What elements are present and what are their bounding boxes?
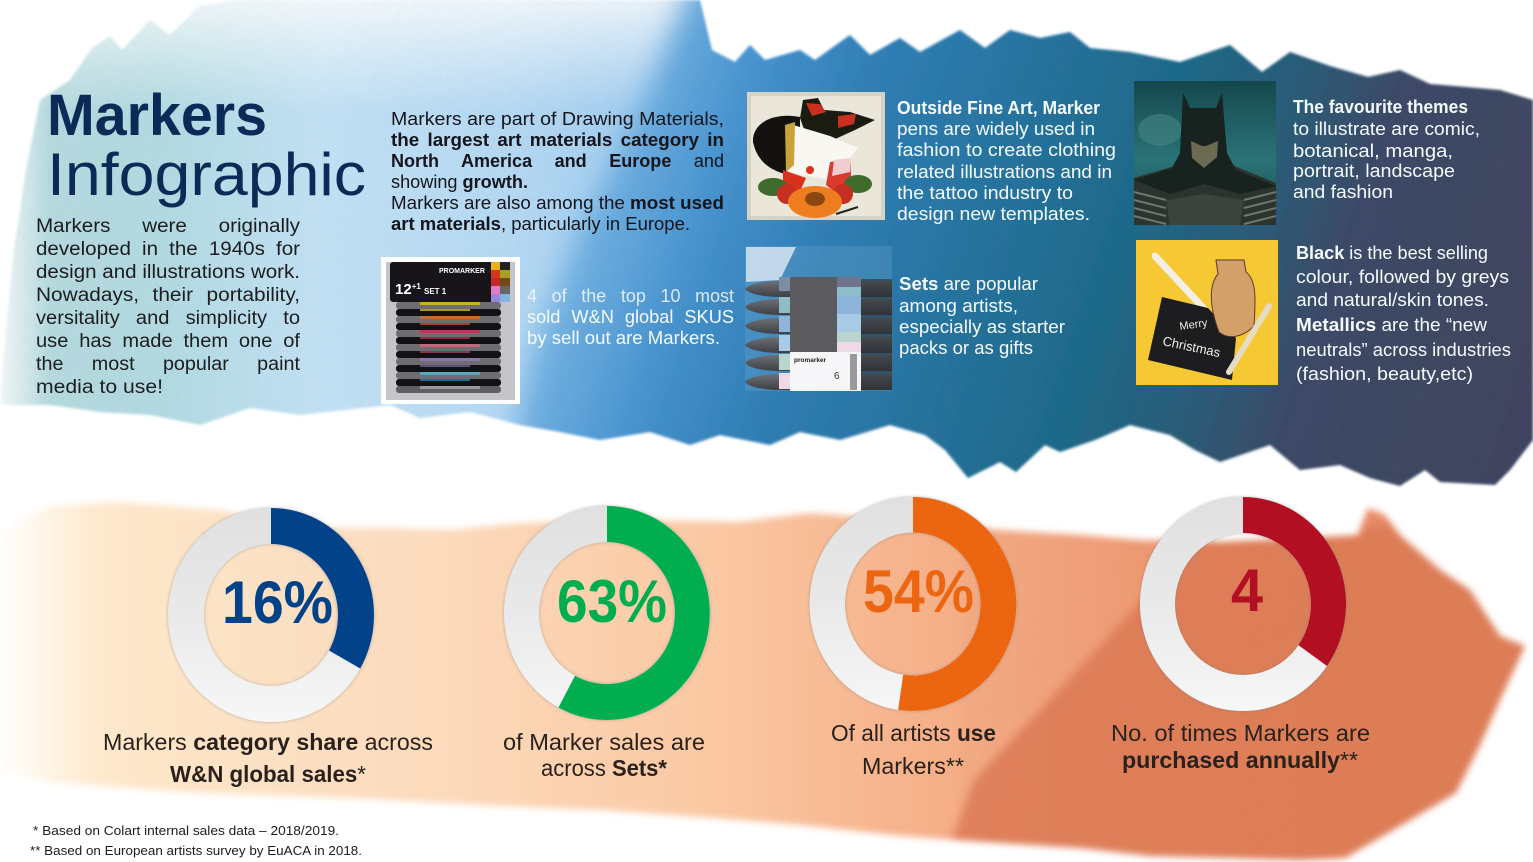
text block: outside fine art: Outside Fine Art, Marker [897, 97, 1100, 118]
text block: top ten SKUs: by sell out are Markers. [527, 327, 720, 348]
title: Infographic [47, 141, 366, 208]
text block: outside fine art [897, 97, 1116, 224]
text block: outside fine art: fashion to create clothing [897, 139, 1116, 160]
caption: artists: Markers** [862, 753, 964, 779]
caption: category share: Markers category share across [103, 729, 433, 755]
text block: outside fine art: the tattoo industry to [897, 182, 1073, 203]
text block: outside fine art: design new templates. [897, 203, 1090, 224]
caption: sets: across Sets* [541, 755, 667, 781]
text block: sets: especially as starter [899, 316, 1065, 337]
text block: drawing materials: art materials, particularly in Europe. [391, 213, 690, 234]
text block: best selling colours: neutrals” across industries [1296, 339, 1511, 360]
title: Markers [47, 83, 267, 148]
footnotes [30, 823, 362, 858]
text block: favourite themes: The favourite themes [1293, 96, 1468, 117]
footnotes: * Based on Colart internal sales data – 2018/2019. [33, 823, 339, 838]
text block: history of markers: Markers were originally [36, 216, 301, 237]
text block: history of markers: Nowadays, their portability, [36, 285, 300, 306]
text block: top ten SKUs [527, 285, 734, 348]
text block: favourite themes: portrait, landscape [1293, 160, 1455, 181]
text block: history of markers: media to use! [36, 377, 163, 398]
footnotes: ** Based on European artists survey by EuACA in 2018. [30, 843, 362, 858]
caption: purchases: No. of times Markers are [1111, 720, 1370, 746]
text block: favourite themes [1293, 96, 1480, 202]
text block: history of markers: developed in the 1940s for [36, 239, 301, 260]
image: metallic pens on yellow [1136, 240, 1278, 385]
text block: best selling colours [1296, 242, 1511, 384]
donut chart: 4 purchases per year [1140, 497, 1346, 711]
caption: purchases: purchased annually** [1122, 747, 1358, 773]
image: Promarker 12 set pack [381, 257, 520, 404]
text block: top ten SKUs: 4 of the top 10 most [527, 285, 734, 306]
text block: best selling colours: (fashion, beauty,etc) [1296, 363, 1473, 384]
image: Promarker 6 set: 6 [834, 371, 840, 382]
text block: sets [899, 273, 1065, 358]
text block: outside fine art: pens are widely used in [897, 118, 1095, 139]
image: Batman comic illustration [1134, 81, 1276, 225]
text block: favourite themes: to illustrate are comic, [1293, 118, 1480, 139]
text block: favourite themes: botanical, manga, [1293, 140, 1453, 161]
text block: top ten SKUs: sold W&N global SKUS [527, 306, 734, 327]
text block: drawing materials: showing growth. [391, 171, 528, 192]
image: Promarker 6 set: promarker [794, 357, 827, 364]
image: metallic pens on yellow: Merry [1179, 317, 1209, 333]
text block: best selling colours: Black is the best selling [1296, 242, 1488, 263]
image: Promarker 12 set pack: PROMARKER [439, 268, 485, 275]
image: metallic pens on yellow: Christmas [1161, 333, 1222, 360]
caption: artists [831, 720, 996, 779]
text block: drawing materials: the largest art materials category in [391, 129, 724, 150]
text block: best selling colours: Metallics are the “new [1296, 314, 1488, 335]
image: Promarker 6 set [745, 246, 892, 391]
caption: purchases [1111, 720, 1370, 773]
text block: drawing materials: Markers are also among the most used [391, 192, 724, 213]
image: Promarker 12 set pack: SET 1 [424, 287, 447, 296]
text block: history of markers: the most popular paint [36, 354, 301, 375]
background: blue watercolour wash [0, 0, 1533, 540]
text block: sets: packs or as gifts [899, 337, 1033, 358]
text block: drawing materials: Markers are part of Drawing Materials, [391, 108, 724, 129]
text block: history of markers: design and illustrations work. [36, 262, 300, 283]
text block: outside fine art: related illustrations and in [897, 161, 1112, 182]
donut chart: 63% sets: 63% [557, 568, 667, 635]
image: Promarker 12 set pack: +1 [412, 282, 421, 291]
background: orange watercolour wash [0, 490, 1533, 862]
text block: history of markers: versitality and simplicity to [36, 308, 300, 329]
caption: category share: W&N global sales* [170, 761, 366, 787]
donut chart: 16% category share [168, 508, 374, 722]
donut chart: 4 purchases per year: 4 [1231, 557, 1264, 624]
donut chart: 63% sets [504, 506, 710, 720]
text block: history of markers: use has made them one of [36, 331, 301, 352]
donut chart: 54% artists [810, 497, 1017, 711]
caption: sets: of Marker sales are [503, 729, 705, 755]
caption: artists: Of all artists use [831, 720, 996, 746]
caption: category share [103, 729, 433, 787]
text block: history of markers [36, 216, 301, 398]
text block: sets: Sets are popular [899, 273, 1038, 294]
text block: best selling colours: and natural/skin tones. [1296, 289, 1489, 310]
text block: best selling colours: colour, followed by greys [1296, 266, 1509, 287]
donut chart: 54% artists: 54% [863, 558, 974, 625]
text block: sets: among artists, [899, 295, 1018, 316]
image: Promarker 12 set pack: 12 [395, 281, 412, 298]
donut chart: 16% category share: 16% [222, 569, 333, 636]
text block: drawing materials: North America and Europe and [391, 150, 724, 171]
text block: favourite themes: and fashion [1293, 181, 1393, 202]
caption: sets [503, 729, 705, 781]
image: tattoo illustration [747, 92, 885, 220]
title [47, 83, 366, 208]
text block: drawing materials [391, 108, 724, 234]
